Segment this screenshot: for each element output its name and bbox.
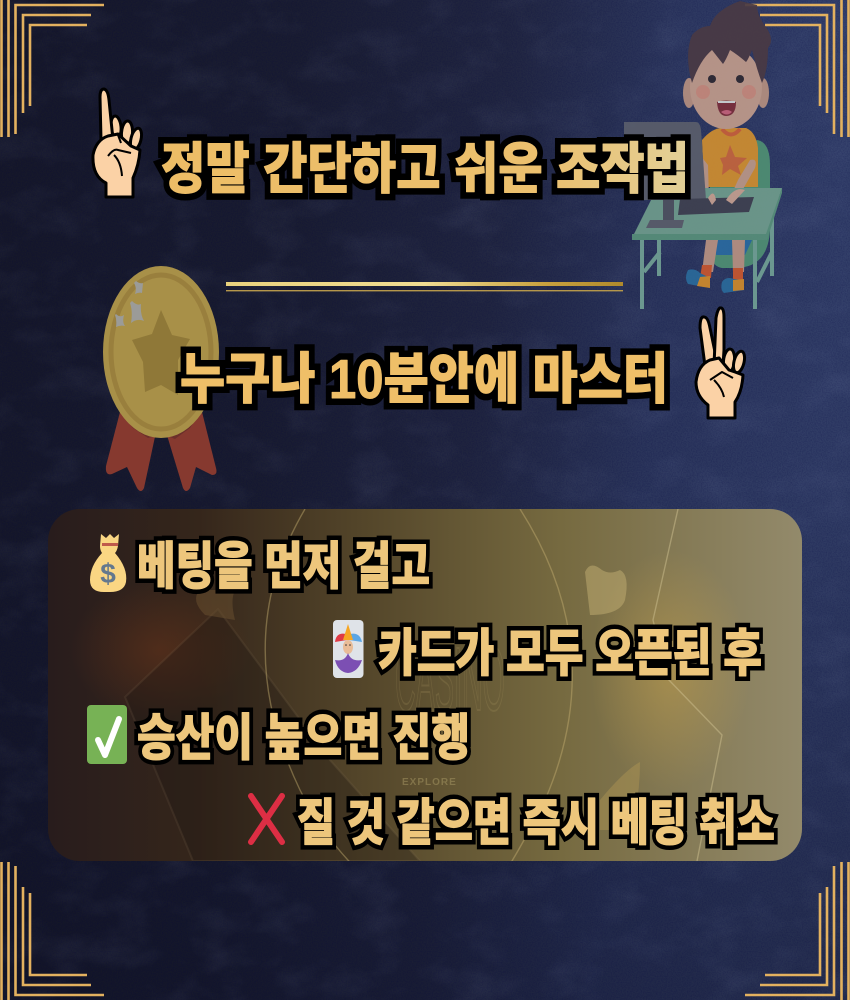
medal star	[132, 310, 190, 395]
illustration: boy at computer	[624, 1, 782, 309]
heading: 정말 간단하고 쉬운 조작법: 정말 간단하고 쉬운 조작법	[161, 138, 689, 200]
desk back legs	[659, 210, 772, 276]
icon: victory hand	[696, 308, 747, 418]
shirt with star	[702, 128, 758, 187]
ghost explore label: EXPLORE	[402, 777, 457, 788]
medal with ribbons	[103, 266, 219, 491]
panel background	[48, 509, 802, 861]
heading: 누구나 10분안에 마스터: 누구나 10분안에 마스터	[180, 348, 668, 410]
step 1 text: 베팅을 먼저 걸고	[137, 538, 430, 595]
arms	[700, 155, 756, 200]
keyboard	[678, 197, 754, 215]
hands	[708, 189, 745, 205]
boy legs and shorts	[686, 240, 752, 293]
icon: red cross	[251, 796, 282, 842]
step 2 text: 카드가 모두 오픈된 후	[378, 625, 762, 682]
chair	[710, 140, 770, 268]
panel: betting steps	[48, 509, 802, 890]
step 3 text: 승산이 높으면 진행	[137, 710, 470, 766]
hair	[688, 1, 771, 83]
desk top	[632, 188, 782, 309]
step 3 text: 승산이 높으면 진행	[137, 710, 470, 766]
casino artwork	[92, 509, 729, 861]
heading: 누구나 10분안에 마스터: 누구나 10분안에 마스터	[180, 348, 668, 410]
icon: green check mark	[87, 705, 127, 764]
icon: joker card	[333, 620, 364, 678]
gold divider lines	[226, 282, 623, 291]
icon: money bag	[90, 534, 126, 592]
step 1 text: 베팅을 먼저 걸고	[137, 538, 430, 595]
icon: pointing up hand	[93, 89, 144, 197]
ribbons	[106, 412, 216, 491]
step 2 text: 카드가 모두 오픈된 후	[378, 625, 762, 682]
icon: money bag: $	[100, 558, 116, 589]
heading: 정말 간단하고 쉬운 조작법: 정말 간단하고 쉬운 조작법	[161, 138, 689, 200]
computer monitor	[624, 122, 706, 228]
casino artwork: CASINO	[395, 630, 505, 730]
sparkles	[115, 281, 144, 327]
head	[683, 1, 771, 129]
